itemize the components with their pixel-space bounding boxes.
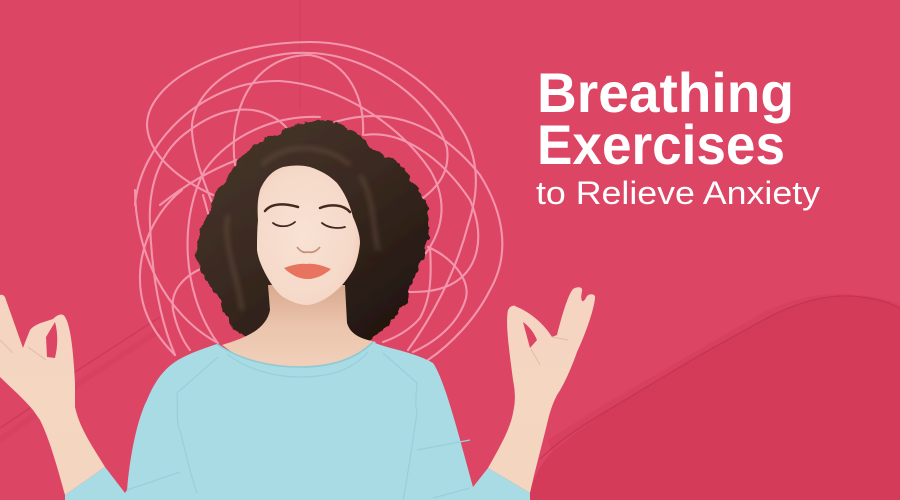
title: Breathing [537, 61, 794, 124]
neck [222, 285, 376, 378]
title [536, 61, 820, 211]
wave shape bottom right [528, 294, 900, 500]
subtitle: to Relieve Anxiety [536, 175, 820, 211]
sweater [65, 342, 530, 500]
closed eyes [273, 222, 345, 228]
scribble circles [135, 42, 502, 360]
eyebrows [265, 204, 350, 212]
right arm and hand [488, 287, 595, 493]
hair [196, 120, 430, 340]
woman [0, 120, 595, 500]
nose [297, 247, 320, 252]
face [257, 166, 360, 305]
background folds [0, 0, 300, 440]
lips [284, 264, 331, 279]
title: Exercises [537, 113, 785, 176]
sweater seams [127, 342, 470, 500]
left arm and hand [0, 295, 105, 495]
